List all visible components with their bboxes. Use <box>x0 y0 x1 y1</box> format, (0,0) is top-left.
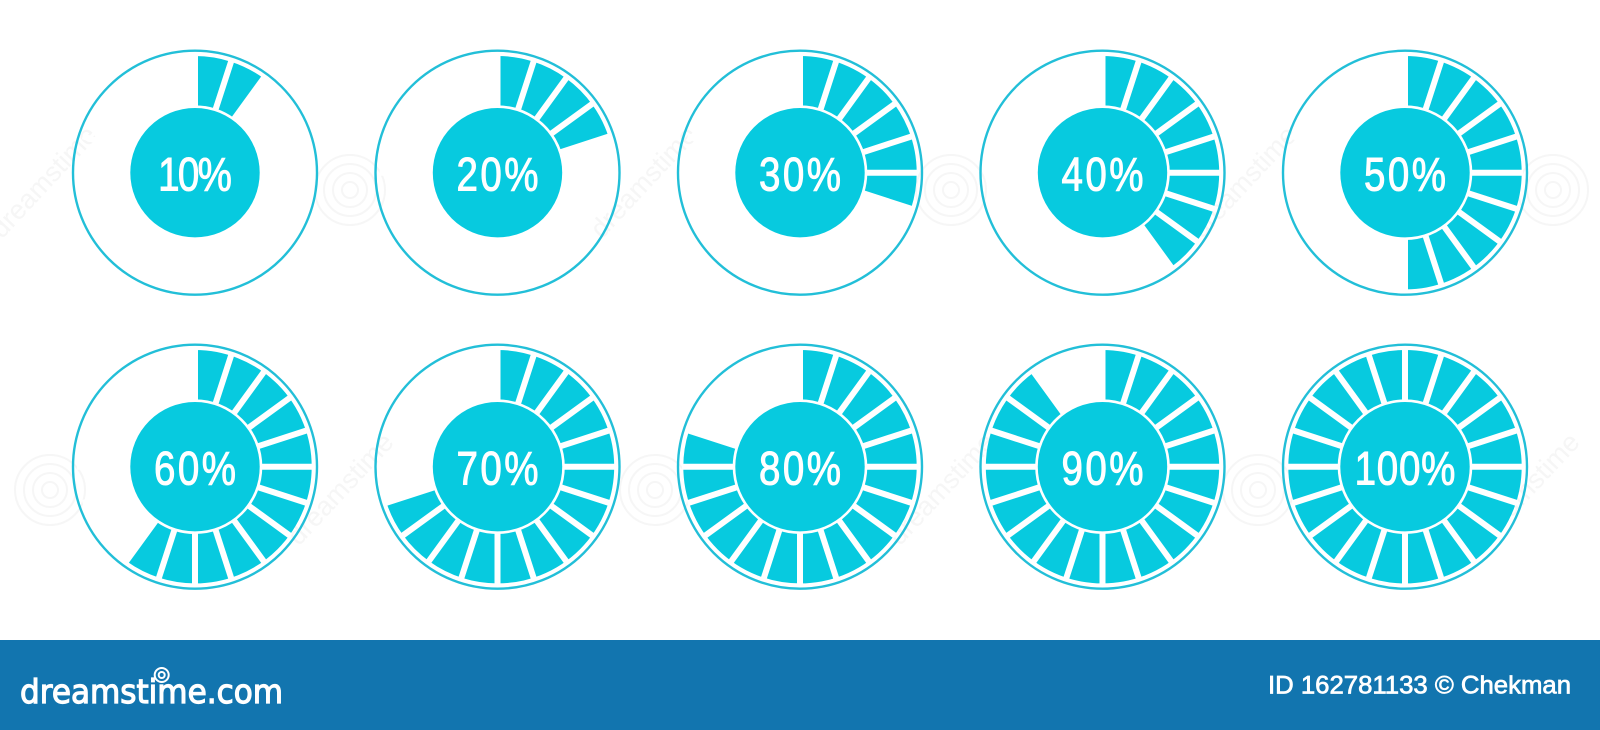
gauge: 50%: 50% <box>1364 149 1446 202</box>
gauge: 80%: 80% <box>759 443 841 496</box>
gauge: 70%: 70% <box>456 443 539 496</box>
footer bar <box>0 640 1600 730</box>
gauge: 40%: 40% <box>1061 149 1144 202</box>
watermark pattern: dreamstime <box>1184 120 1302 244</box>
watermark pattern <box>0 120 1588 551</box>
gauge: 70% <box>376 345 620 589</box>
gauge: 20% <box>376 51 620 295</box>
logo: dreamstime.com: dreamstime.com <box>20 672 283 711</box>
gauge: 30% <box>678 51 922 295</box>
icon: spiral <box>155 668 169 682</box>
gauge: 60% <box>73 345 317 589</box>
watermark pattern: dreamstime <box>882 427 1000 551</box>
gauge: 100% <box>1283 345 1527 589</box>
image id and credit: ID 162781133 © Chekman <box>1268 671 1571 699</box>
watermark pattern: dreamstime <box>281 427 399 551</box>
watermark pattern: dreamstime <box>584 120 702 244</box>
gauge: 40% <box>980 51 1224 295</box>
gauge: 10%: 10% <box>158 149 232 202</box>
gauge: 50% <box>1283 51 1527 295</box>
gauge: 20%: 20% <box>456 149 539 202</box>
gauge: 100%: 100% <box>1355 443 1455 496</box>
gauge: 10% <box>73 51 317 295</box>
gauge: 30%: 30% <box>759 149 841 202</box>
gauge: 60%: 60% <box>154 443 236 496</box>
gauge: 90% <box>980 345 1224 589</box>
gauge: 80% <box>678 345 922 589</box>
gauge: 90%: 90% <box>1061 443 1144 496</box>
watermark pattern: dreamstime <box>1467 427 1585 551</box>
